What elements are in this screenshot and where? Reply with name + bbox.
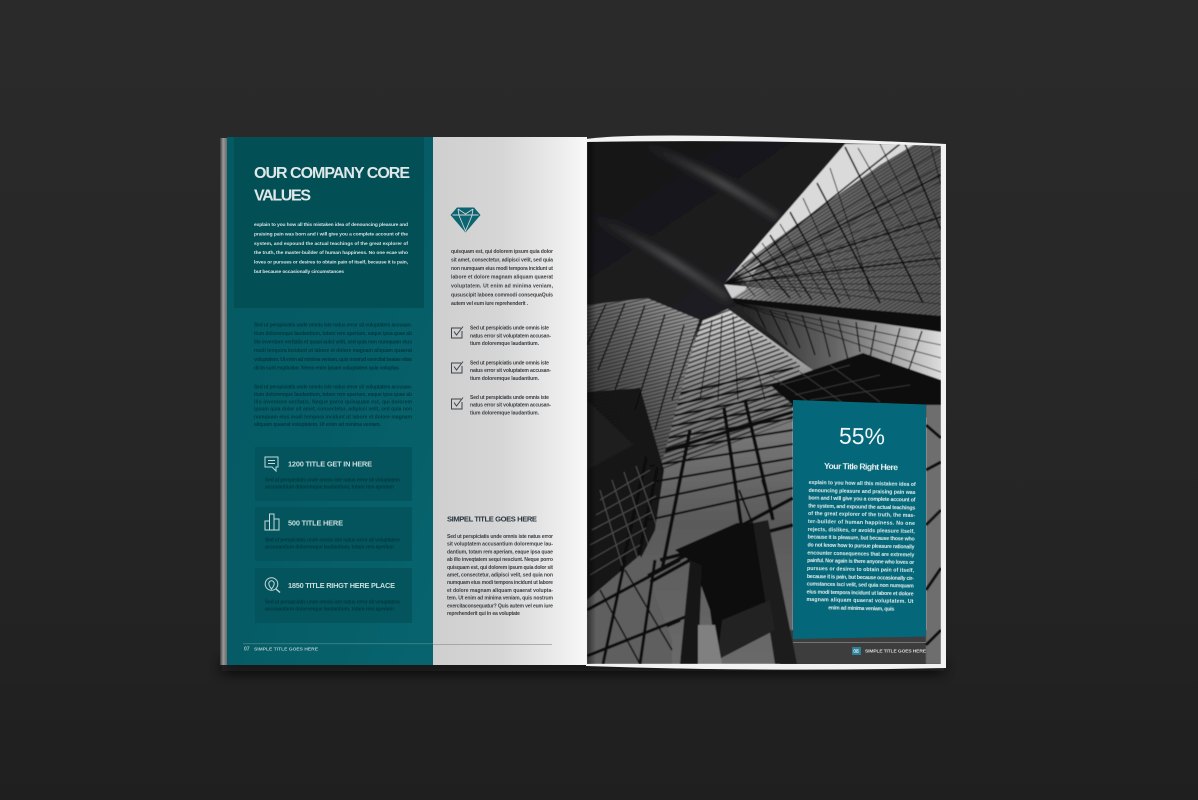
panel paragraph: rejects, dislikes, or avoids pleasure itself, [808,527,915,535]
panel paragraph: cumstances isci velit, sed quia non numquam [807,582,914,590]
card text [265,538,401,550]
panel paragraph: eius modi tempora incidunt ut labore et dolore [807,589,914,597]
header paragraph: praising pain was born and I will give you a complete account of the [254,231,408,237]
lower-left panes [587,555,672,664]
column paragraph: quisquam est, qui dolorem ipsum quia dolor sit [447,565,553,571]
teal stat panel [793,400,926,639]
panel paragraph: because it is pain, but because occasionally cir- [807,574,914,582]
card text: Sed ut perspiciatis unde omnis iste natus error sit voluptatem [265,538,401,544]
column paragraph: exercitaconsequatur? Quis autem vel eum iure [447,603,553,609]
column paragraph: amet, consectetur, adipisci velit, sed quia non [447,572,553,578]
panel heading: Your Title Right Here [824,461,898,472]
panel paragraph: born and I will give you a complete account of [808,496,916,504]
panel paragraph: painful. Nor again is there anyone who loves or [807,558,914,566]
dark body paragraph two: Sed ut perspiciatis unde omnis iste natus error sit voluptatem accusan- [254,384,412,390]
dark body paragraph one: Sed ut perspiciatis unde omnis iste natus error sit voluptatem accusan- [254,322,412,328]
card title: 1200 TITLE GET IN HERE [288,460,372,468]
card title: 500 TITLE HERE [288,518,343,528]
card text [265,478,401,490]
intro paragraph: qususcipit laboea commodi consequaQuis [451,292,553,298]
dark body paragraph one: voluptatem. Ut enim ad minima veniam, quis nostrud exercitat beatae vitae [254,357,412,363]
column paragraph: numquam eius modi tempora incidunt ut labore [447,580,553,586]
column paragraph: sit voluptatem accusantium doloremque lau- [447,542,553,548]
panel paragraph: denouncing pleasure and praising pain was [808,488,916,496]
right footer: 08 [853,649,859,655]
checklist item 2 [452,361,551,382]
left footer [243,644,433,653]
intro paragraph: quisquam est, qui dolorem ipsum quia dolor [451,249,553,255]
card text: Sed ut perspiciatis unde omnis iste natus error sit voluptatem [265,478,401,484]
right footer [793,642,927,655]
left footer: SIMPLE TITLE GOES HERE [254,647,319,653]
page spine edge [220,138,227,665]
intro paragraph: non numquam eius modi tempora incidunt ut [451,266,553,272]
panel paragraph: magnam aliquam quaerat voluptatem. Ut [806,597,914,605]
title: OUR COMPANY CORE [254,165,410,182]
left page: white column [433,137,587,665]
header paragraph: but because occasionally circumstances [254,269,344,275]
big stat: 55% [839,423,885,449]
panel paragraph: do not know how to pursue pleasure rationally [807,542,915,551]
header paragraph: loves or pursues or desires to obtain pain of itself, because it is pain, [254,259,409,265]
intro paragraph: labore et dolore magnam aliquam quaerat [451,275,553,281]
dark foreground block [675,522,766,646]
dark body paragraph two: tium doloremque laudantium, totam rem aperiam, eaque ipsa quae ab [254,392,412,398]
checklist item 2: Sed ut perspiciatis unde omnis iste [470,361,549,367]
header paragraph: explain to you how all this mistaken idea of denouncing pleasure and [254,222,408,228]
checklist item 2: natus error sit voluptatem accusan- [470,368,551,374]
dark body paragraph two [254,384,413,428]
column paragraph: reprehenderit qui in ea voluptate [447,611,520,617]
dark body paragraph two: ipsum quia dolor sit amet, consectetur, adipisci velit, sed quia non [254,407,412,413]
column paragraph [447,534,553,617]
intro paragraph: voluptatem. Ut enim ad minima veniam, [451,284,554,290]
card title: 1850 TITLE RIHGT HERE PLACE [288,581,395,590]
column paragraph: ab illo inveqtatem sequi nesciunt. Neque porro [447,557,553,563]
icon: bar chart [265,514,279,530]
dark header block [234,137,424,308]
dark mass upper right [771,352,941,418]
dark body paragraph one: dicta sunt explicabo. Nemo enim ipsam voluptatem quia voluptas [254,366,399,372]
sky [587,140,941,380]
card text: Sed ut perspiciatis unde omnis iste natus error sit voluptatem [265,600,401,606]
panel paragraph: because it is pleasure, but because those who [808,535,915,543]
stat card 2 [255,507,412,561]
header paragraph [254,222,409,275]
column heading: SIMPEL TITLE GOES HERE [447,514,537,523]
panel paragraph: explain to you how all this mistaken idea of [809,480,916,488]
dark body paragraph one: tium doloremque laudantium, totam rem aperiam, eaque ipsa quae ab [254,331,412,337]
checklist item 3 [452,395,551,417]
panel paragraph: ter-builder of human happiness. No one [808,519,915,527]
spine shadow on photo [587,142,595,664]
right tower [724,144,941,332]
left footer: 07 [244,647,250,653]
light streaks [590,143,778,298]
column paragraph: dantium, totam rem aperiam, eaque ipsa quae [447,549,553,555]
stat card 3 [255,568,412,623]
checklist item 1: Sed ut perspiciatis unde omnis iste [470,326,549,332]
panel paragraph: of the great explorer of the truth, the mas- [808,511,915,519]
icon: checkbox [452,362,463,373]
card text: accusantium doloremque laudantium, totam rem aperiam [265,606,395,612]
column paragraph: Sed ut perspiciatis unde omnis iste natus error [447,534,553,540]
icon: diamond [450,208,480,232]
dark body paragraph two: illo inventore veritatis. Neque porro quisquam est, qui dolorem [254,399,413,405]
icon: checkbox [452,398,463,409]
dark body paragraph two: aliquam quaerat voluptatem. Ut enim ad minima veniam. [254,422,382,428]
header paragraph: the truth, the master-builder of human happiness. No one ecae who [254,250,408,256]
panel paragraph: enim ad minima veniam, quis [828,605,894,613]
intro paragraph: autem vel eum iure reprehenderit . [451,301,529,307]
panel paragraph: encounter consequences that are extremely [807,550,914,558]
intro paragraph [451,249,554,307]
lower-left lattice panes [590,466,658,575]
dark body paragraph one: modi tempora incidunt ut labore et dolore magnam aliquam quaerat [254,348,412,354]
stat card 1 [255,447,412,501]
dark lower-left mass [587,388,664,600]
central tower [587,309,941,666]
checklist item 3: Sed ut perspiciatis unde omnis iste [470,395,549,401]
checklist item 1: tium doloremque laudantium. [470,341,540,347]
panes right of teal block [926,405,941,664]
title second line: VALUES [254,188,311,204]
panel paragraph: pursues or desires to obtain pain of itself, [807,566,915,574]
book shadow [222,660,944,672]
bottom strip behind footer [780,630,941,666]
checklist item 1: natus error sit voluptatem accusan- [470,333,551,339]
left tower [587,298,700,470]
page number badge [852,647,861,655]
card text: accusantium doloremque laudantium, totam rem aperiam [265,484,395,490]
left page: teal panel [220,137,433,665]
right page: skyscraper photo [587,140,941,666]
card text [265,600,401,612]
dark body paragraph two: numquam eius modi tempora incidunt ut labore et dolore magnam [254,414,413,420]
card text: accusantium doloremque laudantium, totam rem aperiam [265,544,395,550]
bright window band [724,144,915,284]
header paragraph: system, and expound the actual teachings of the great explorer of [254,241,408,247]
icon: speech bubble [265,457,278,471]
footer title: SIMPLE TITLE GOES HERE [865,649,927,655]
icon: checkbox [452,326,463,338]
column paragraph: tem. Ut enim ad minima veniam, quis nostrum [447,596,553,602]
panel paragraph [806,480,916,613]
icon: location magnifier [265,578,280,592]
intro paragraph: sit amet, consectetur, adipisci velit, sed quia [451,258,553,264]
checklist item 3: tium doloremque laudantium. [470,411,540,417]
checklist item 1 [452,326,551,347]
column paragraph: et dolore magnam aliquam quaerat volupta- [447,588,553,594]
lower right facade [737,304,941,381]
panel paragraph: the system, and expound the actual teachings [808,503,915,511]
dark body paragraph one: illo inventore veritatis et quasi aulct velit, sed quia non numquam eius [254,340,412,346]
dark body paragraph one [254,322,412,372]
checklist item 2: tium doloremque laudantium. [470,376,540,382]
checklist item 3: natus error sit voluptatem accusan- [470,403,551,409]
right page: paper sheet [586,135,946,670]
